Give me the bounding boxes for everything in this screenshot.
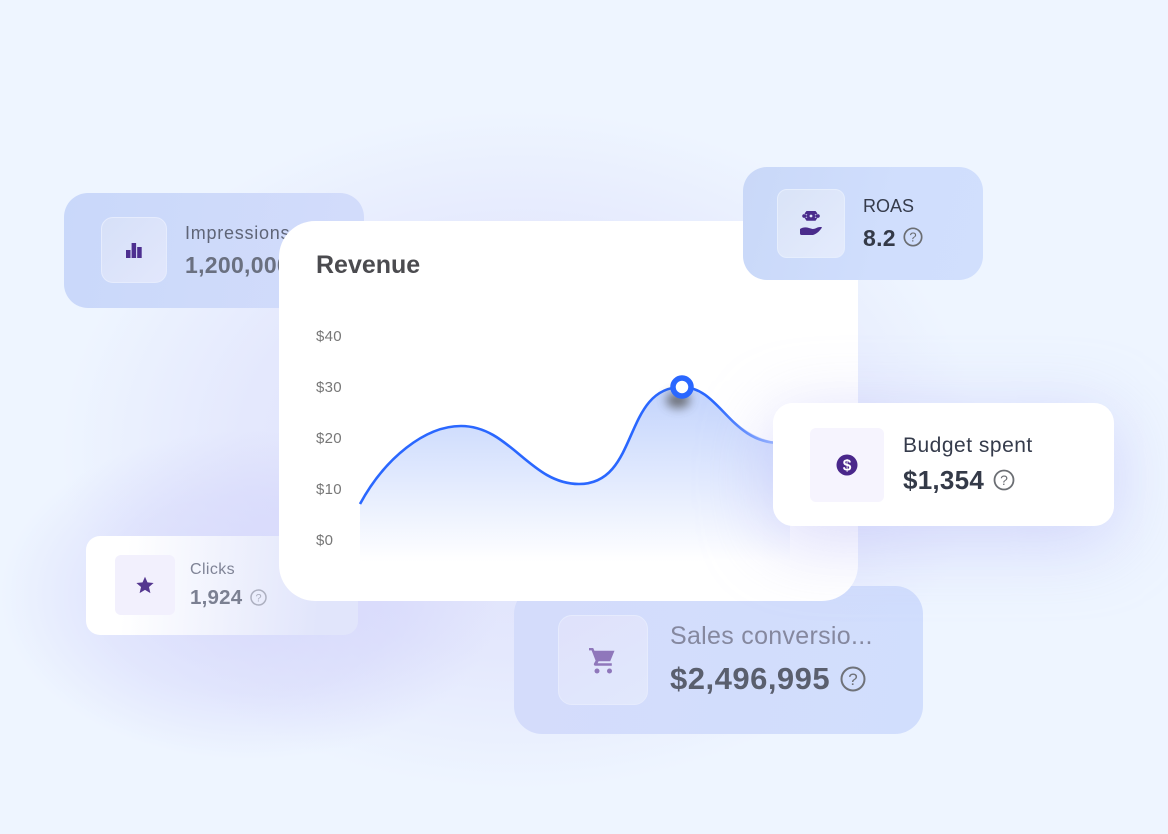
icon: cart [558,615,648,705]
heading: revenue: Revenue [316,251,420,279]
icon: help [994,470,1014,490]
y axis labels: $0 [316,532,333,549]
icon: hand with coin [777,189,845,258]
icon: help: ? [255,592,262,604]
value: ROAS: 8.2 [863,225,896,251]
icon: help: ? [1000,472,1008,488]
panel: revenue chart [279,221,858,601]
glow: budget card shadow [773,403,1114,526]
card: impressions [64,193,364,308]
label: ROAS: ROAS [863,196,914,216]
value: impressions: 1,200,000 [185,252,290,278]
y axis labels: $20 [316,430,342,447]
icon: dollar coin: $ [843,458,852,474]
card: clicks [86,536,358,635]
card: budget spent [773,403,1114,526]
icon: bar chart [101,217,167,283]
label: clicks: Clicks [190,561,235,578]
value: budget spent: $1,354 [903,465,984,495]
area line chart [358,375,790,540]
value: sales conversions: $2,496,995 [670,661,830,696]
marker shadow [666,392,690,408]
y axis labels: $30 [316,379,342,396]
label: impressions: Impressions [185,223,290,243]
label: sales conversions: Sales conversio... [670,622,873,650]
card: sales conversions [514,586,923,734]
icon: help: ? [909,230,917,244]
value: clicks: 1,924 [190,586,242,609]
y axis labels [316,328,342,549]
icon: help: ? [848,670,858,689]
card: ROAS [743,167,983,280]
icon: dollar coin [810,428,884,502]
y axis labels: $40 [316,328,342,345]
data point marker [673,378,691,396]
y axis labels: $10 [316,481,342,498]
label: budget spent: Budget spent [903,434,1033,457]
icon: help [840,666,866,692]
icon: help [250,589,267,606]
icon: help [904,228,922,246]
icon: star [115,555,175,615]
